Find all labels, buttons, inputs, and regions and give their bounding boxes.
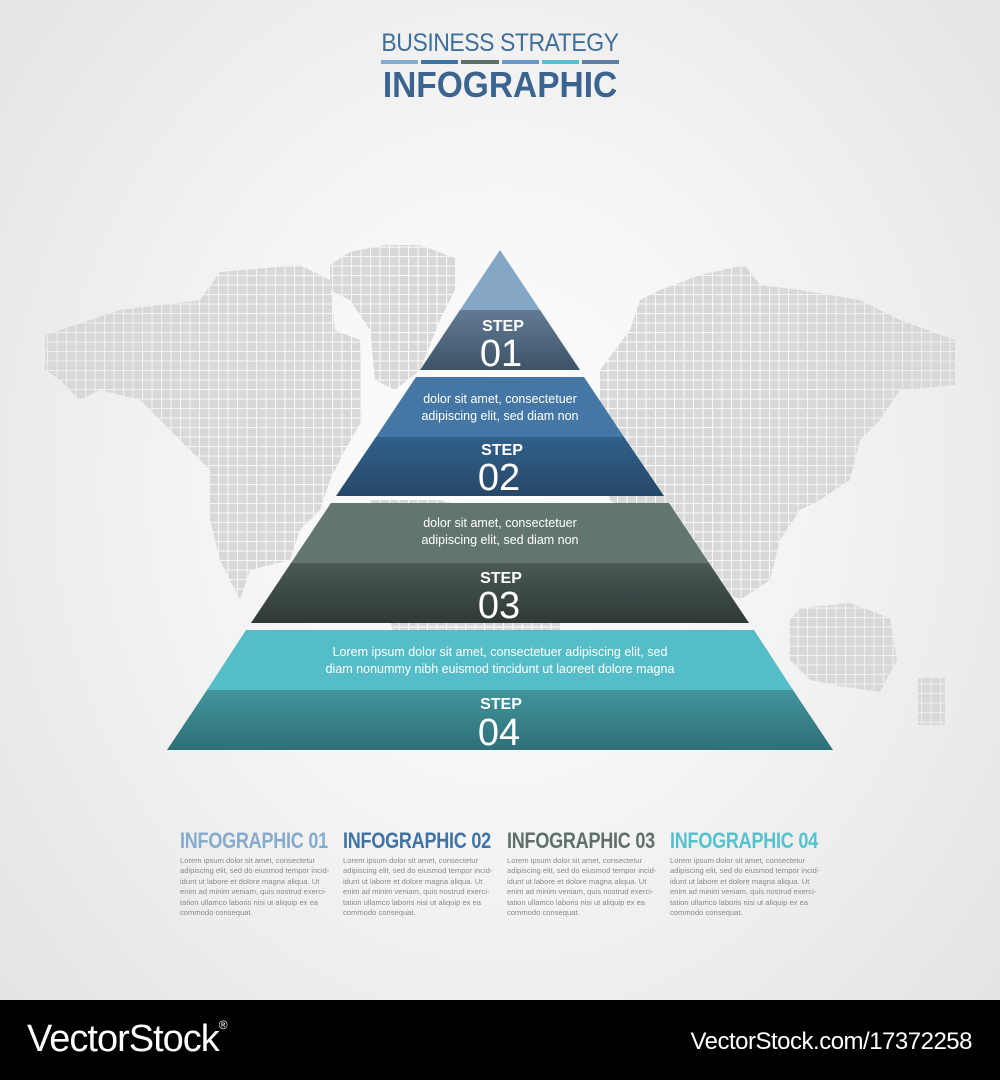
column 4 — [670, 828, 820, 917]
tier 1 — [420, 250, 580, 375]
column 3: Lorem ipsum dolor sit amet, consectetur adipiscing elit, sed do eiusmod tempor incid-idunt ut labore et dolore magna aliqua. Ut enim ad minim veniam, quis nostrud exerci-tation ullamco laboris nisi ut aliquip ex ea commodo consequat. — [507, 856, 656, 917]
tier 4: diam nonummy nibh euismod tincidunt ut laoreet dolore magna — [326, 662, 674, 676]
column 1: Lorem ipsum dolor sit amet, consectetur adipiscing elit, sed do eiusmod tempor incid-idunt ut labore et dolore magna aliqua. Ut enim ad minim veniam, quis nostrud exerci-tation ullamco laboris nisi ut aliquip ex ea commodo consequat. — [180, 856, 329, 917]
tier 2: STEP — [481, 442, 523, 459]
column 4: Lorem ipsum dolor sit amet, consectetur adipiscing elit, sed do eiusmod tempor incid-idunt ut labore et dolore magna aliqua. Ut enim ad minim veniam, quis nostrud exerci-tation ullamco laboris nisi ut aliquip ex ea commodo consequat. — [670, 856, 819, 917]
column 3 — [507, 828, 656, 917]
tier 3: adipiscing elit, sed diam non — [421, 533, 579, 547]
color bar — [381, 60, 619, 64]
footer url: VectorStock.com/17372258 — [690, 1028, 972, 1055]
column 1: INFOGRAPHIC 01 — [180, 828, 328, 853]
tier 3 — [251, 503, 749, 627]
tier 2: dolor sit amet, consectetuer — [423, 392, 577, 406]
tier 1: STEP — [482, 318, 524, 335]
tier 2 — [336, 377, 664, 499]
tier 3: STEP — [480, 570, 522, 587]
column 4: INFOGRAPHIC 04 — [670, 828, 818, 853]
footer bar — [0, 1000, 1000, 1080]
column 2: INFOGRAPHIC 02 — [343, 828, 491, 853]
tier 4 — [167, 630, 833, 754]
tier 2: 02 — [478, 457, 520, 499]
column 2 — [343, 828, 492, 917]
tier 4: 04 — [478, 712, 520, 754]
column 1 — [180, 828, 330, 917]
tier 4: Lorem ipsum dolor sit amet, consectetuer adipiscing elit, sed — [333, 645, 667, 659]
column 2: Lorem ipsum dolor sit amet, consectetur adipiscing elit, sed do eiusmod tempor incid-idunt ut labore et dolore magna aliqua. Ut enim ad minim veniam, quis nostrud exerci-tation ullamco laboris nisi ut aliquip ex ea commodo consequat. — [343, 856, 492, 917]
tier 3: dolor sit amet, consectetuer — [423, 516, 577, 530]
main heading: INFOGRAPHIC — [383, 64, 617, 105]
column 3: INFOGRAPHIC 03 — [507, 828, 655, 853]
subtitle: business strategy: BUSINESS STRATEGY — [381, 29, 619, 57]
tier 3: 03 — [478, 585, 520, 627]
footer logo: VectorStock® — [27, 1018, 227, 1060]
tier 2: adipiscing elit, sed diam non — [421, 409, 579, 423]
title — [381, 29, 619, 105]
tier 4: STEP — [480, 696, 522, 713]
tier 1: 01 — [480, 333, 522, 375]
